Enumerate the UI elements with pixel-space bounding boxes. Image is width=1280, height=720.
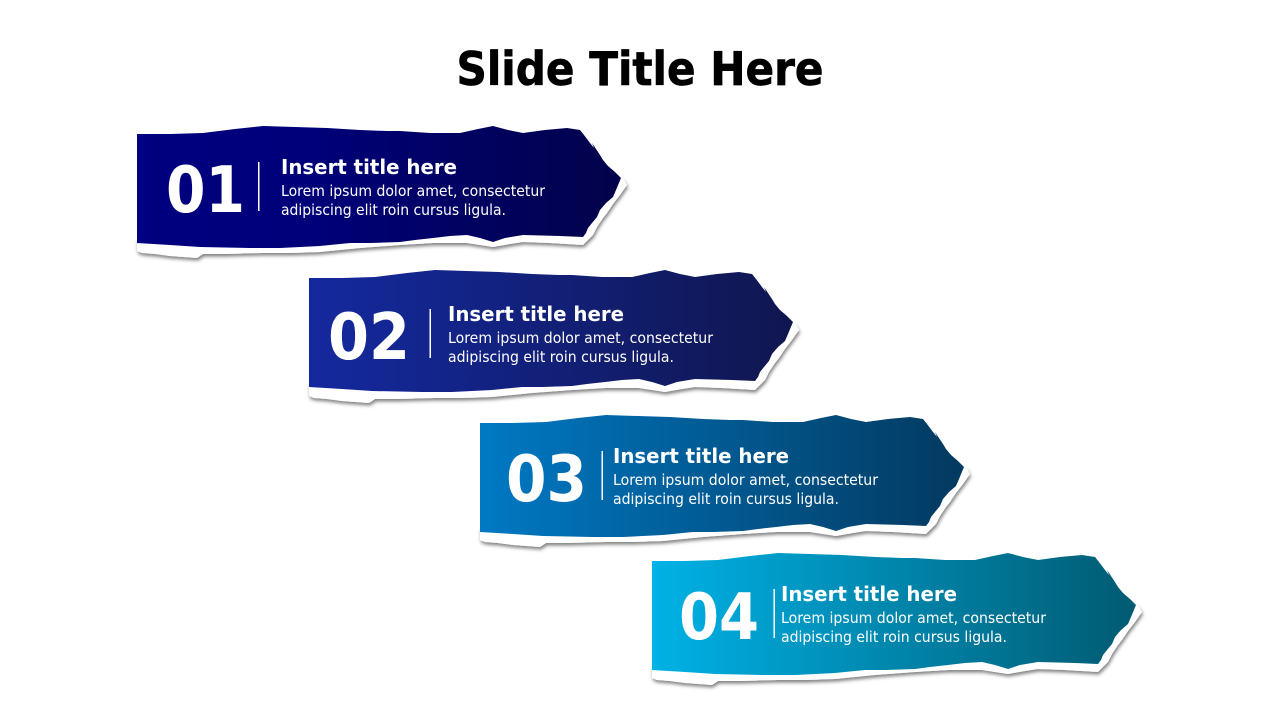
body text 1: Lorem ipsum dolor amet, consectetur: [281, 182, 546, 200]
dark torn shape 3: [480, 415, 964, 537]
body text 3: adipiscing elit roin cursus ligula.: [613, 490, 839, 508]
divider 2: [430, 309, 431, 358]
divider 1: [258, 162, 260, 211]
title text 4: Insert title here: [781, 582, 957, 606]
number 03: 03: [506, 443, 587, 517]
title text 3: Insert title here: [613, 444, 789, 468]
title: Slide Title Here: [456, 42, 824, 96]
title text 2: Insert title here: [448, 302, 624, 326]
number 02: 02: [328, 301, 410, 375]
banner 4: [652, 553, 1142, 685]
dark torn shape 4: [652, 553, 1136, 675]
torn paper edge 3: [480, 466, 970, 547]
body text 4: adipiscing elit roin cursus ligula.: [781, 628, 1007, 646]
title text 1: Insert title here: [281, 155, 457, 179]
number 01: 01: [166, 154, 245, 228]
body text 4: Lorem ipsum dolor amet, consectetur: [781, 609, 1047, 627]
number 04: 04: [679, 581, 759, 655]
dark torn shape 1: [137, 126, 621, 248]
torn paper edge 1: [137, 177, 627, 258]
divider 4: [774, 589, 775, 638]
body text 1: adipiscing elit roin cursus ligula.: [281, 201, 506, 219]
banner 2: [309, 270, 799, 403]
body text 2: Lorem ipsum dolor amet, consectetur: [448, 329, 714, 347]
torn paper edge 2: [309, 322, 799, 403]
divider 3: [602, 451, 603, 500]
body text 3: Lorem ipsum dolor amet, consectetur: [613, 471, 879, 489]
body text 2: adipiscing elit roin cursus ligula.: [448, 348, 674, 366]
banner 1: [137, 126, 627, 258]
banner 3: [480, 415, 970, 547]
torn paper edge 4: [652, 604, 1142, 685]
dark torn shape 2: [309, 270, 793, 392]
